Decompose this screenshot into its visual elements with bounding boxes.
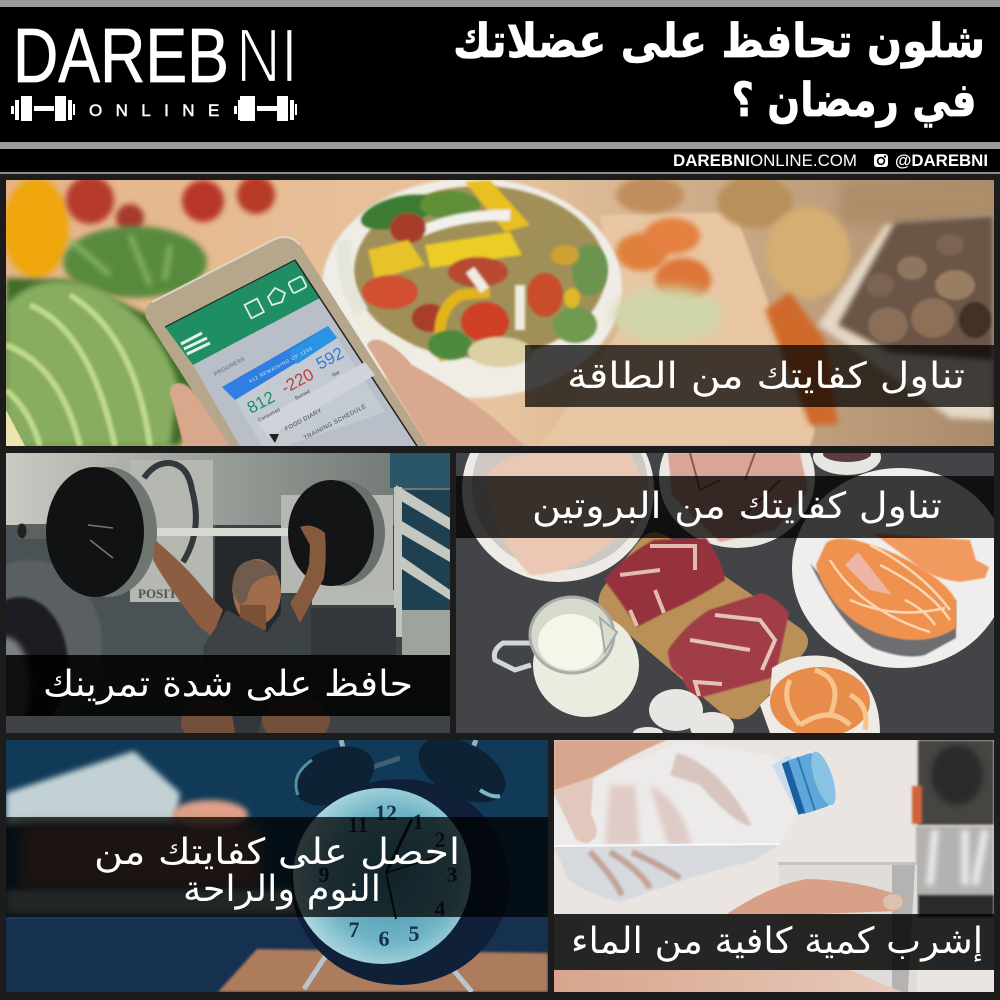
- caption: sleep: احصل على كفايتك من: [94, 832, 460, 873]
- clock numbers: [318, 800, 458, 951]
- blurred sleeper: [6, 751, 306, 914]
- header: [0, 0, 1000, 174]
- gym background: [0, 453, 450, 733]
- athlete: [153, 525, 330, 744]
- clock numbers: 5: [408, 921, 420, 946]
- milk jug: [494, 597, 639, 717]
- chicken plate: [462, 453, 654, 582]
- clock numbers: 9: [318, 862, 330, 887]
- logo: DAREBNI ONLINE: ONLINE: [89, 101, 233, 120]
- phone with diet app: [145, 237, 428, 446]
- clock numbers: 7: [348, 917, 360, 942]
- caption: protein: [456, 476, 994, 538]
- ramekin: [813, 453, 881, 475]
- caption: energy: [525, 345, 994, 407]
- title: [453, 14, 985, 128]
- hand holding bottle: [554, 740, 752, 845]
- lower hand: [554, 879, 904, 992]
- panel: protein: [456, 453, 994, 733]
- app calorie panel: -220: [278, 365, 317, 398]
- panel: energy: [3, 176, 994, 446]
- hands: [170, 340, 525, 446]
- water bottle: [554, 741, 841, 902]
- app calorie panel: 812: [244, 387, 278, 418]
- caption: sleep: النوم والراحة: [183, 869, 381, 910]
- logo: DAREBNI ONLINE: DAREB: [13, 13, 229, 99]
- website and social handle: [673, 151, 988, 170]
- drinking glass: [778, 862, 917, 992]
- barbell: [18, 467, 385, 597]
- app calorie panel: Net: [331, 370, 341, 379]
- app calorie panel: PROGRESS: [213, 356, 246, 378]
- caption: energy: تناول كفايتك من الطاقة: [567, 356, 965, 397]
- app calorie panel: 412 REMAINING OF 1200: [248, 346, 314, 385]
- app calorie panel: 592: [313, 343, 347, 374]
- clock numbers: 4: [434, 896, 446, 921]
- caption: training intensity: حافظ على شدة تمرينك: [43, 664, 413, 705]
- salmon plate: [792, 468, 1000, 668]
- table and food background: [540, 176, 994, 446]
- caption: protein: تناول كفايتك من البروتين: [532, 486, 942, 527]
- panel: sleep: [6, 724, 548, 992]
- clock numbers: 1: [412, 809, 424, 834]
- gym background: POSITI: [138, 586, 182, 601]
- app calorie panel: Burned: [294, 389, 311, 402]
- ham plate: [659, 453, 815, 548]
- app calorie panel: TRAINING SCHEDULE: [303, 404, 368, 442]
- clock numbers: 6: [378, 926, 390, 951]
- salad bowl: [322, 178, 723, 398]
- clock numbers: 11: [348, 812, 368, 837]
- clock numbers: 3: [446, 862, 458, 887]
- panel: training intensity: [0, 453, 450, 744]
- caption: sleep: [6, 817, 548, 917]
- shrimp bowl: [760, 656, 880, 737]
- caption: training intensity: [6, 655, 450, 716]
- alarm clock: [292, 740, 506, 992]
- logo: DAREBNI ONLINE: NI: [236, 13, 298, 99]
- lettuce and tomatoes: [3, 176, 275, 446]
- wooden board and steaks: [598, 532, 808, 719]
- website and social handle: @DAREBNI: [895, 151, 988, 170]
- app calorie panel: Consumed: [257, 407, 281, 424]
- clock numbers: 2: [434, 827, 446, 852]
- caption: water: [554, 914, 994, 970]
- panel: water: [554, 740, 994, 992]
- blurred background objects: [912, 740, 994, 917]
- icon: instagram: [874, 154, 888, 167]
- app calorie panel: FOOD DIARY: [284, 408, 323, 433]
- website and social handle: DAREBNIONLINE.COM: [673, 151, 857, 170]
- clock numbers: 12: [375, 800, 397, 825]
- app calorie panel: [213, 326, 385, 446]
- wooden table: [218, 949, 548, 992]
- eggs: [633, 689, 734, 733]
- caption: water: إشرب كمية كافية من الماء: [571, 921, 983, 962]
- app toolbar icons: [245, 276, 307, 318]
